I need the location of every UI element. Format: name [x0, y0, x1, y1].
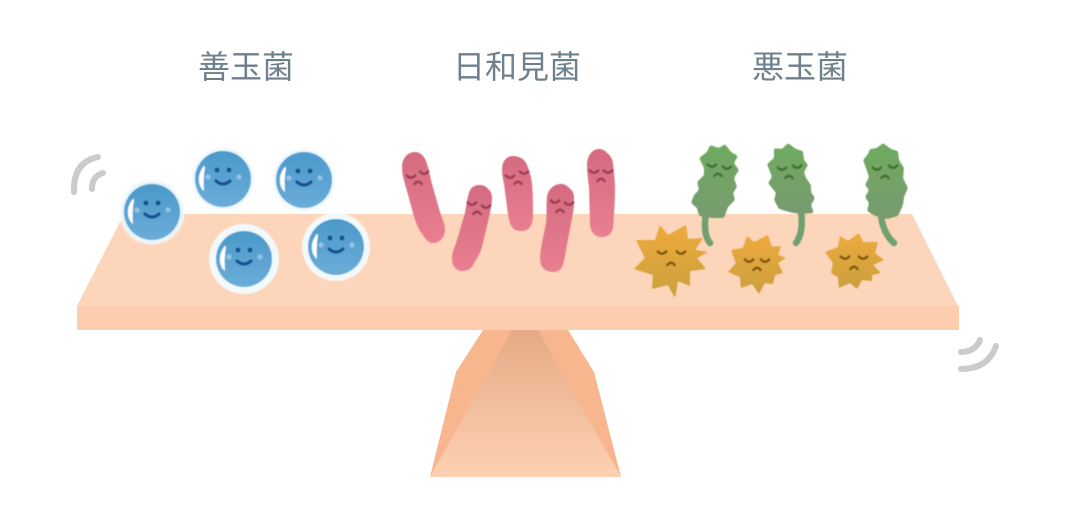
title: 悪玉菌: 悪玉菌	[752, 49, 848, 85]
green bacterium 2	[767, 143, 815, 243]
icon: motion arcs left	[74, 157, 103, 192]
good bacterium 5	[302, 213, 370, 281]
good bacteria group	[119, 147, 370, 294]
yellow bacterium 3	[825, 233, 884, 289]
title: 日和見菌: 日和見菌	[453, 49, 581, 85]
opportunistic bacterium 3	[502, 156, 533, 231]
opportunistic bacterium 4	[540, 184, 574, 272]
icon: motion arcs right	[961, 340, 996, 369]
seesaw pedestal	[430, 330, 621, 477]
green bacterium 1	[691, 144, 739, 243]
opportunistic bacterium 1	[402, 152, 445, 243]
green bacterium 3	[863, 143, 908, 243]
title: 善玉菌: 善玉菌	[198, 49, 294, 85]
opportunistic bacterium 2	[452, 185, 492, 271]
opportunistic bacteria group	[402, 149, 615, 272]
seesaw plank	[77, 214, 959, 330]
yellow bacterium 1	[634, 225, 708, 298]
good bacterium 1	[119, 179, 185, 245]
good bacterium 4	[209, 224, 279, 294]
good bacterium 2	[191, 147, 255, 211]
yellow bacterium 2	[728, 235, 786, 294]
good bacterium 3	[272, 148, 336, 212]
opportunistic bacterium 5	[587, 149, 615, 237]
bad bacteria group	[634, 143, 908, 298]
